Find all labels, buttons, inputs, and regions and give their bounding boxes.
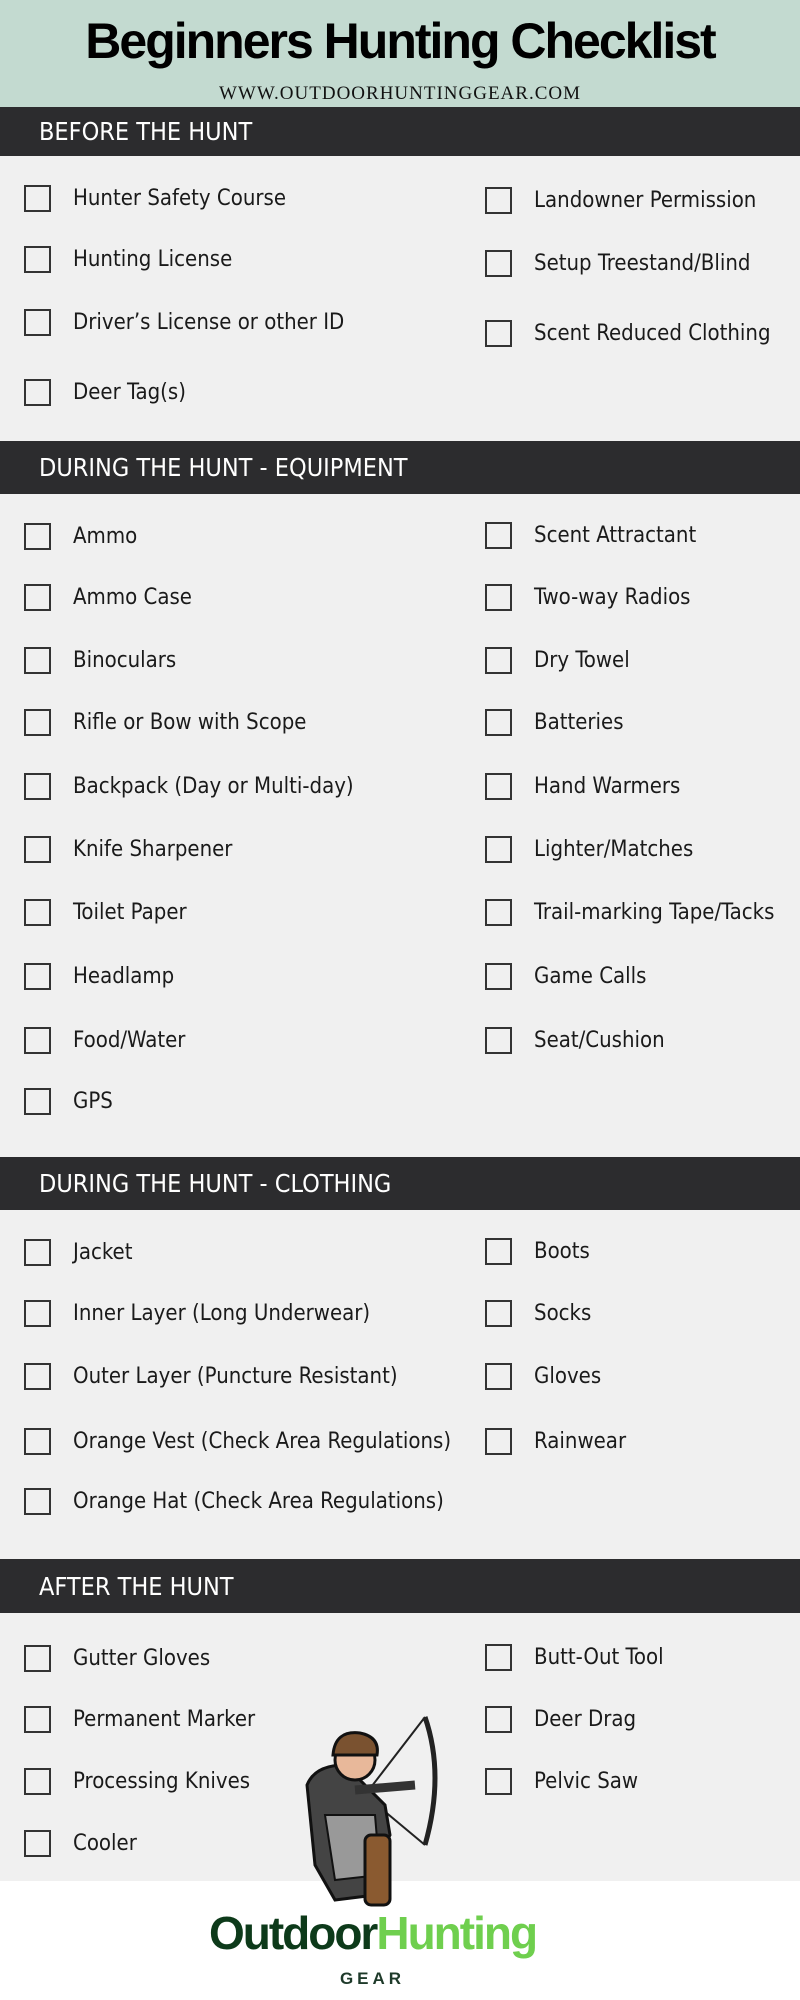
panel: equipment: Binoculars [73,648,176,672]
panel: before the hunt [0,156,800,441]
panel: equipment: Food/Water [73,1028,185,1052]
panel: before the hunt: Setup Treestand/Blind [534,250,750,276]
section header: clothing: DURING THE HUNT - CLOTHING [39,1169,391,1198]
panel: equipment: Trail-marking Tape/Tacks [534,900,774,924]
panel: before the hunt: Driver’s License or other ID [73,310,344,334]
panel: equipment: Game Calls [534,964,646,988]
title: Beginners Hunting Checklist [85,13,715,69]
panel: clothing: Rainwear [534,1428,626,1454]
panel: after the hunt: Butt-Out Tool [534,1644,664,1670]
panel: clothing: Jacket [73,1240,132,1264]
panel: equipment: Backpack (Day or Multi-day) [73,774,354,798]
section header: after the hunt: AFTER THE HUNT [39,1572,234,1600]
panel: clothing: Socks [534,1300,591,1326]
website url: WWW.OUTDOORHUNTINGGEAR.COM [219,83,581,104]
panel: equipment: Knife Sharpener [73,836,232,862]
panel: equipment: Toilet Paper [73,900,187,924]
panel: equipment: Two-way Radios [534,584,690,610]
panel: equipment: Ammo Case [73,584,192,610]
panel: clothing: Orange Vest (Check Area Regulations) [73,1428,451,1454]
logo [209,1907,536,1988]
panel: clothing: Outer Layer (Puncture Resistant) [73,1364,398,1388]
panel: after the hunt: Cooler [73,1830,137,1856]
header background [0,0,800,107]
panel: before the hunt: Hunter Safety Course [73,186,286,210]
section header: before the hunt: BEFORE THE HUNT [39,117,252,146]
icon: hunter with bow [306,1716,438,1906]
panel: after the hunt: Processing Knives [73,1768,250,1794]
panel: equipment: Scent Attractant [534,522,696,548]
panel: equipment: Hand Warmers [534,774,680,798]
panel: equipment: Dry Towel [534,648,630,672]
logo: GEAR [340,1969,405,1988]
panel: equipment: Batteries [534,710,624,734]
panel: before the hunt: Scent Reduced Clothing [534,320,771,346]
panel: clothing: Boots [534,1238,590,1264]
panel: after the hunt: Pelvic Saw [534,1768,638,1794]
section header: clothing [0,1157,800,1210]
logo: OutdoorHunting [209,1907,536,1959]
section header: before the hunt [0,107,800,156]
panel: after the hunt: Gutter Gloves [73,1646,210,1670]
panel: equipment: Lighter/Matches [534,836,693,862]
panel: equipment: Ammo [73,524,137,548]
panel: after the hunt [0,1613,800,1881]
panel: equipment: Seat/Cushion [534,1028,665,1052]
panel: before the hunt: Hunting License [73,246,232,272]
panel: clothing: Gloves [534,1364,601,1388]
panel: clothing [0,1210,800,1559]
section header: equipment: DURING THE HUNT - EQUIPMENT [39,453,408,482]
panel: equipment: Rifle or Bow with Scope [73,710,306,734]
panel: before the hunt: Landowner Permission [534,188,756,212]
panel: equipment [0,494,800,1157]
panel: equipment: GPS [73,1088,113,1114]
panel: clothing: Orange Hat (Check Area Regulations) [73,1488,444,1514]
panel: clothing: Inner Layer (Long Underwear) [73,1300,370,1326]
panel: equipment: Headlamp [73,964,174,988]
panel: after the hunt: Permanent Marker [73,1706,255,1732]
panel: before the hunt: Deer Tag(s) [73,380,186,404]
section header: equipment [0,441,800,494]
section header: after the hunt [0,1559,800,1613]
panel: after the hunt: Deer Drag [534,1706,636,1732]
